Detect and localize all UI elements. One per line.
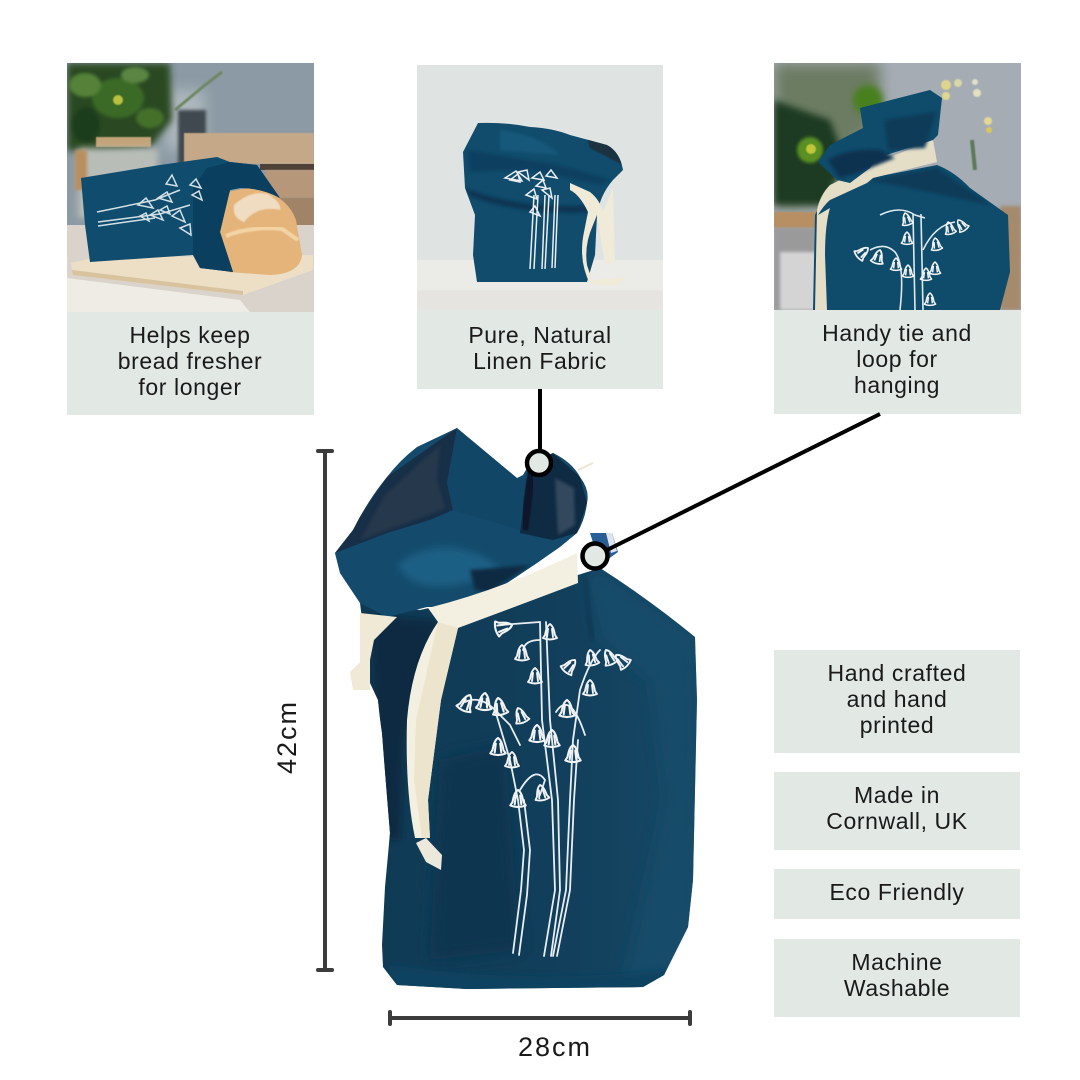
callout: fabric pointer: [527, 389, 551, 475]
caption: linen fabric: [417, 310, 663, 389]
callout: loop pointer: [582, 414, 880, 568]
bag: body: [360, 569, 697, 989]
dimension: width 28cm: 28cm: [518, 1032, 592, 1062]
feature: machine washable: Washable: [844, 975, 950, 1001]
caption: tie and loop: [774, 310, 1021, 414]
caption: tie and loop: hanging: [854, 372, 940, 398]
collar: lower band: [335, 533, 577, 610]
caption: bread freshness: bread fresher: [118, 348, 262, 374]
feature: made in Cornwall: Cornwall, UK: [826, 808, 968, 834]
collar: right inner lining: [520, 453, 587, 540]
collar: dark linen lining left: [335, 428, 457, 553]
collar: centre fold: [457, 428, 517, 478]
dimension: height 42cm: 42cm: [272, 700, 302, 774]
caption: linen fabric: Linen Fabric: [473, 348, 607, 374]
caption: linen fabric: Pure, Natural: [468, 322, 612, 348]
photo: bag with loaf of bread: [67, 63, 314, 312]
dimension: width 28cm: [390, 1012, 690, 1062]
bag: cream tie strap: [350, 553, 578, 870]
feature: machine washable: Machine: [851, 949, 943, 975]
feature: eco friendly: Eco Friendly: [829, 879, 965, 905]
main product: linen bread bag: [330, 425, 710, 1000]
feature: hand crafted: and hand: [847, 686, 947, 712]
feature: hand crafted: printed: [860, 712, 934, 738]
feature: machine washable: [774, 939, 1020, 1017]
dimension: height 42cm: [272, 451, 332, 970]
bag: loop tab and string end: [578, 463, 618, 565]
caption: tie and loop: Handy tie and: [822, 320, 972, 346]
photo: bag on white shelf: [417, 65, 663, 310]
caption: bread freshness: for longer: [138, 374, 242, 400]
bag: collar folds: [330, 425, 592, 625]
photo: bag with tie and hanging loop: [774, 63, 1021, 310]
feature: hand crafted: [774, 650, 1020, 753]
feature: eco friendly: [774, 869, 1020, 919]
caption: bread freshness: Helps keep: [129, 322, 251, 348]
bag: bluebell print: [456, 618, 632, 956]
feature: made in Cornwall: [774, 772, 1020, 850]
feature: hand crafted: Hand crafted: [828, 660, 966, 686]
caption: tie and loop: loop for: [856, 346, 938, 372]
caption: bread freshness: [67, 312, 314, 415]
feature: made in Cornwall: Made in: [854, 782, 940, 808]
